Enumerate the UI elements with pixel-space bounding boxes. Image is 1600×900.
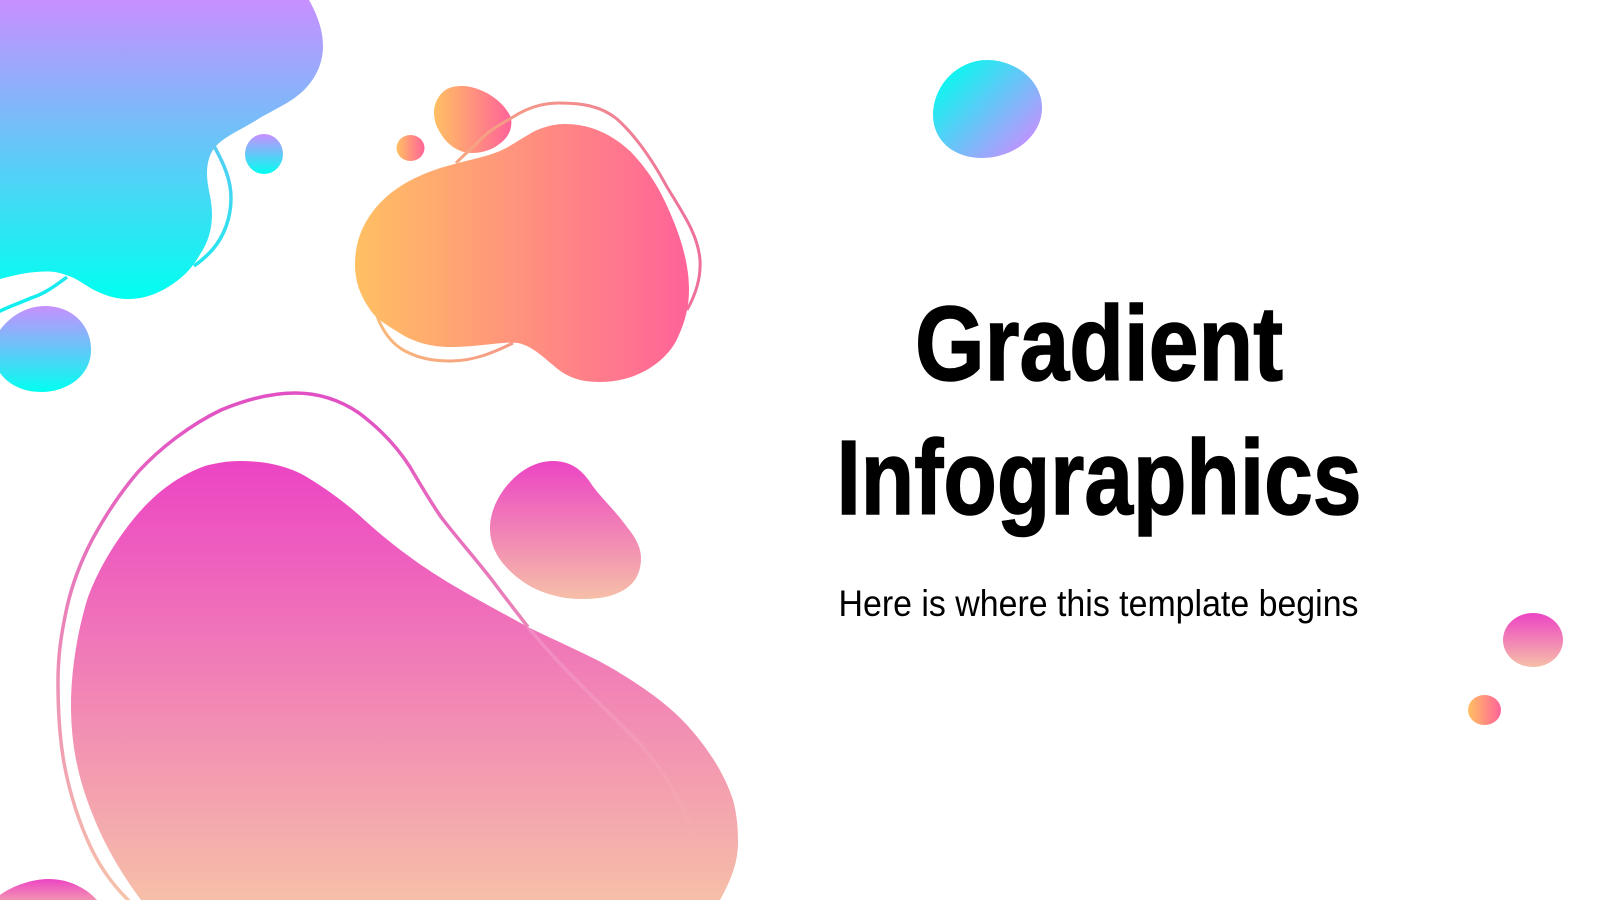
outline: orange top — [456, 103, 700, 310]
blob: teal top center — [933, 60, 1042, 158]
title line 2: Infographics — [836, 419, 1362, 537]
blob: purple to cyan large — [0, 0, 323, 299]
outline: orange bottom — [377, 316, 513, 361]
blob: pink to peach large — [71, 461, 738, 900]
blob group: orange — [355, 86, 700, 382]
outline: cyan blob left curve — [0, 277, 67, 312]
blob: small purple to cyan dot — [245, 134, 283, 174]
outline: pink blob — [58, 393, 528, 900]
blob: small pink right — [1503, 613, 1563, 667]
blob: small orange — [434, 86, 511, 153]
title line 1: Gradient — [915, 285, 1283, 403]
title — [836, 285, 1362, 537]
outline: pink blob faint inner line — [528, 627, 700, 850]
blob: orange to pink large — [355, 124, 689, 382]
blob: purple to cyan left edge — [0, 306, 91, 392]
subtitle: Here is where this template begins — [838, 583, 1358, 624]
blob: pink bottom left — [0, 879, 97, 900]
blob: small pink — [490, 461, 641, 599]
blob group: cyan top left — [0, 0, 323, 392]
outline: cyan blob right curve — [194, 146, 231, 266]
blob: small orange right — [1468, 695, 1501, 725]
blob: tiny orange dot — [396, 135, 424, 161]
blob group: pink — [0, 393, 738, 900]
